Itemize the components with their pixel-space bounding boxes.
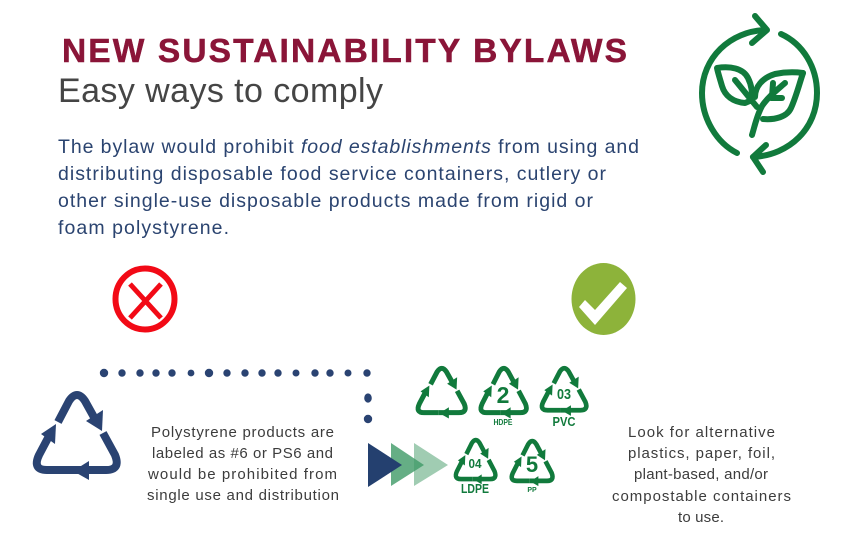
polystyrene description: single use and distribution (147, 487, 339, 504)
alternatives description: plastics, paper, foil, (628, 445, 775, 462)
polystyrene description: would be prohibited from (147, 466, 337, 483)
intro paragraph: distributing disposable food service containers, cutlery or (58, 163, 606, 185)
icon: recycling code 2 HDPE (481, 368, 526, 427)
intro paragraph: The bylaw would prohibit food establishments from using and (58, 136, 639, 158)
icon: approved green check (572, 263, 636, 335)
intro paragraph: foam polystyrene. (58, 217, 229, 239)
icon: recycling code 5 PP: 5 (526, 452, 538, 477)
arrows: chevron triangles (368, 443, 448, 487)
alternatives description (612, 424, 791, 526)
icon: recycling code 5 PP: PP (527, 487, 537, 494)
icon: green recycling symbol (418, 368, 465, 419)
intro paragraph (58, 136, 639, 239)
polystyrene description (147, 424, 339, 504)
icon: blue recycling triangle (37, 395, 117, 480)
intro paragraph: other single-use disposable products made from rigid or (58, 190, 594, 212)
polystyrene description: labeled as #6 or PS6 and (152, 445, 333, 462)
icon: recycling code 04 LDPE: LDPE (461, 482, 489, 496)
icon: recycling loop with leaves (702, 16, 817, 172)
icon: recycling code 03 PVC (542, 368, 586, 429)
icon: recycling code 2 HDPE: 2 (497, 382, 509, 408)
icon: prohibited red X (116, 268, 174, 330)
alternatives description: compostable containers (612, 488, 791, 505)
subtitle: Easy ways to comply (58, 72, 383, 110)
icon: recycling code 03 PVC: PVC (552, 415, 576, 429)
icon: recycling code 5 PP (512, 441, 553, 494)
icon: recycling code 03 PVC: 03 (557, 386, 571, 403)
icon: recycling code 04 LDPE (456, 440, 495, 496)
icon: recycling code 2 HDPE: HDPE (494, 418, 513, 427)
dotted connector (100, 369, 372, 423)
alternatives description: to use. (678, 509, 724, 526)
polystyrene description: Polystyrene products are (151, 424, 334, 441)
alternatives description: Look for alternative (628, 424, 775, 441)
alternatives description: plant-based, and/or (634, 466, 768, 483)
icon: recycling code 04 LDPE: 04 (468, 456, 482, 471)
title: NEW SUSTAINABILITY BYLAWS (62, 33, 627, 70)
